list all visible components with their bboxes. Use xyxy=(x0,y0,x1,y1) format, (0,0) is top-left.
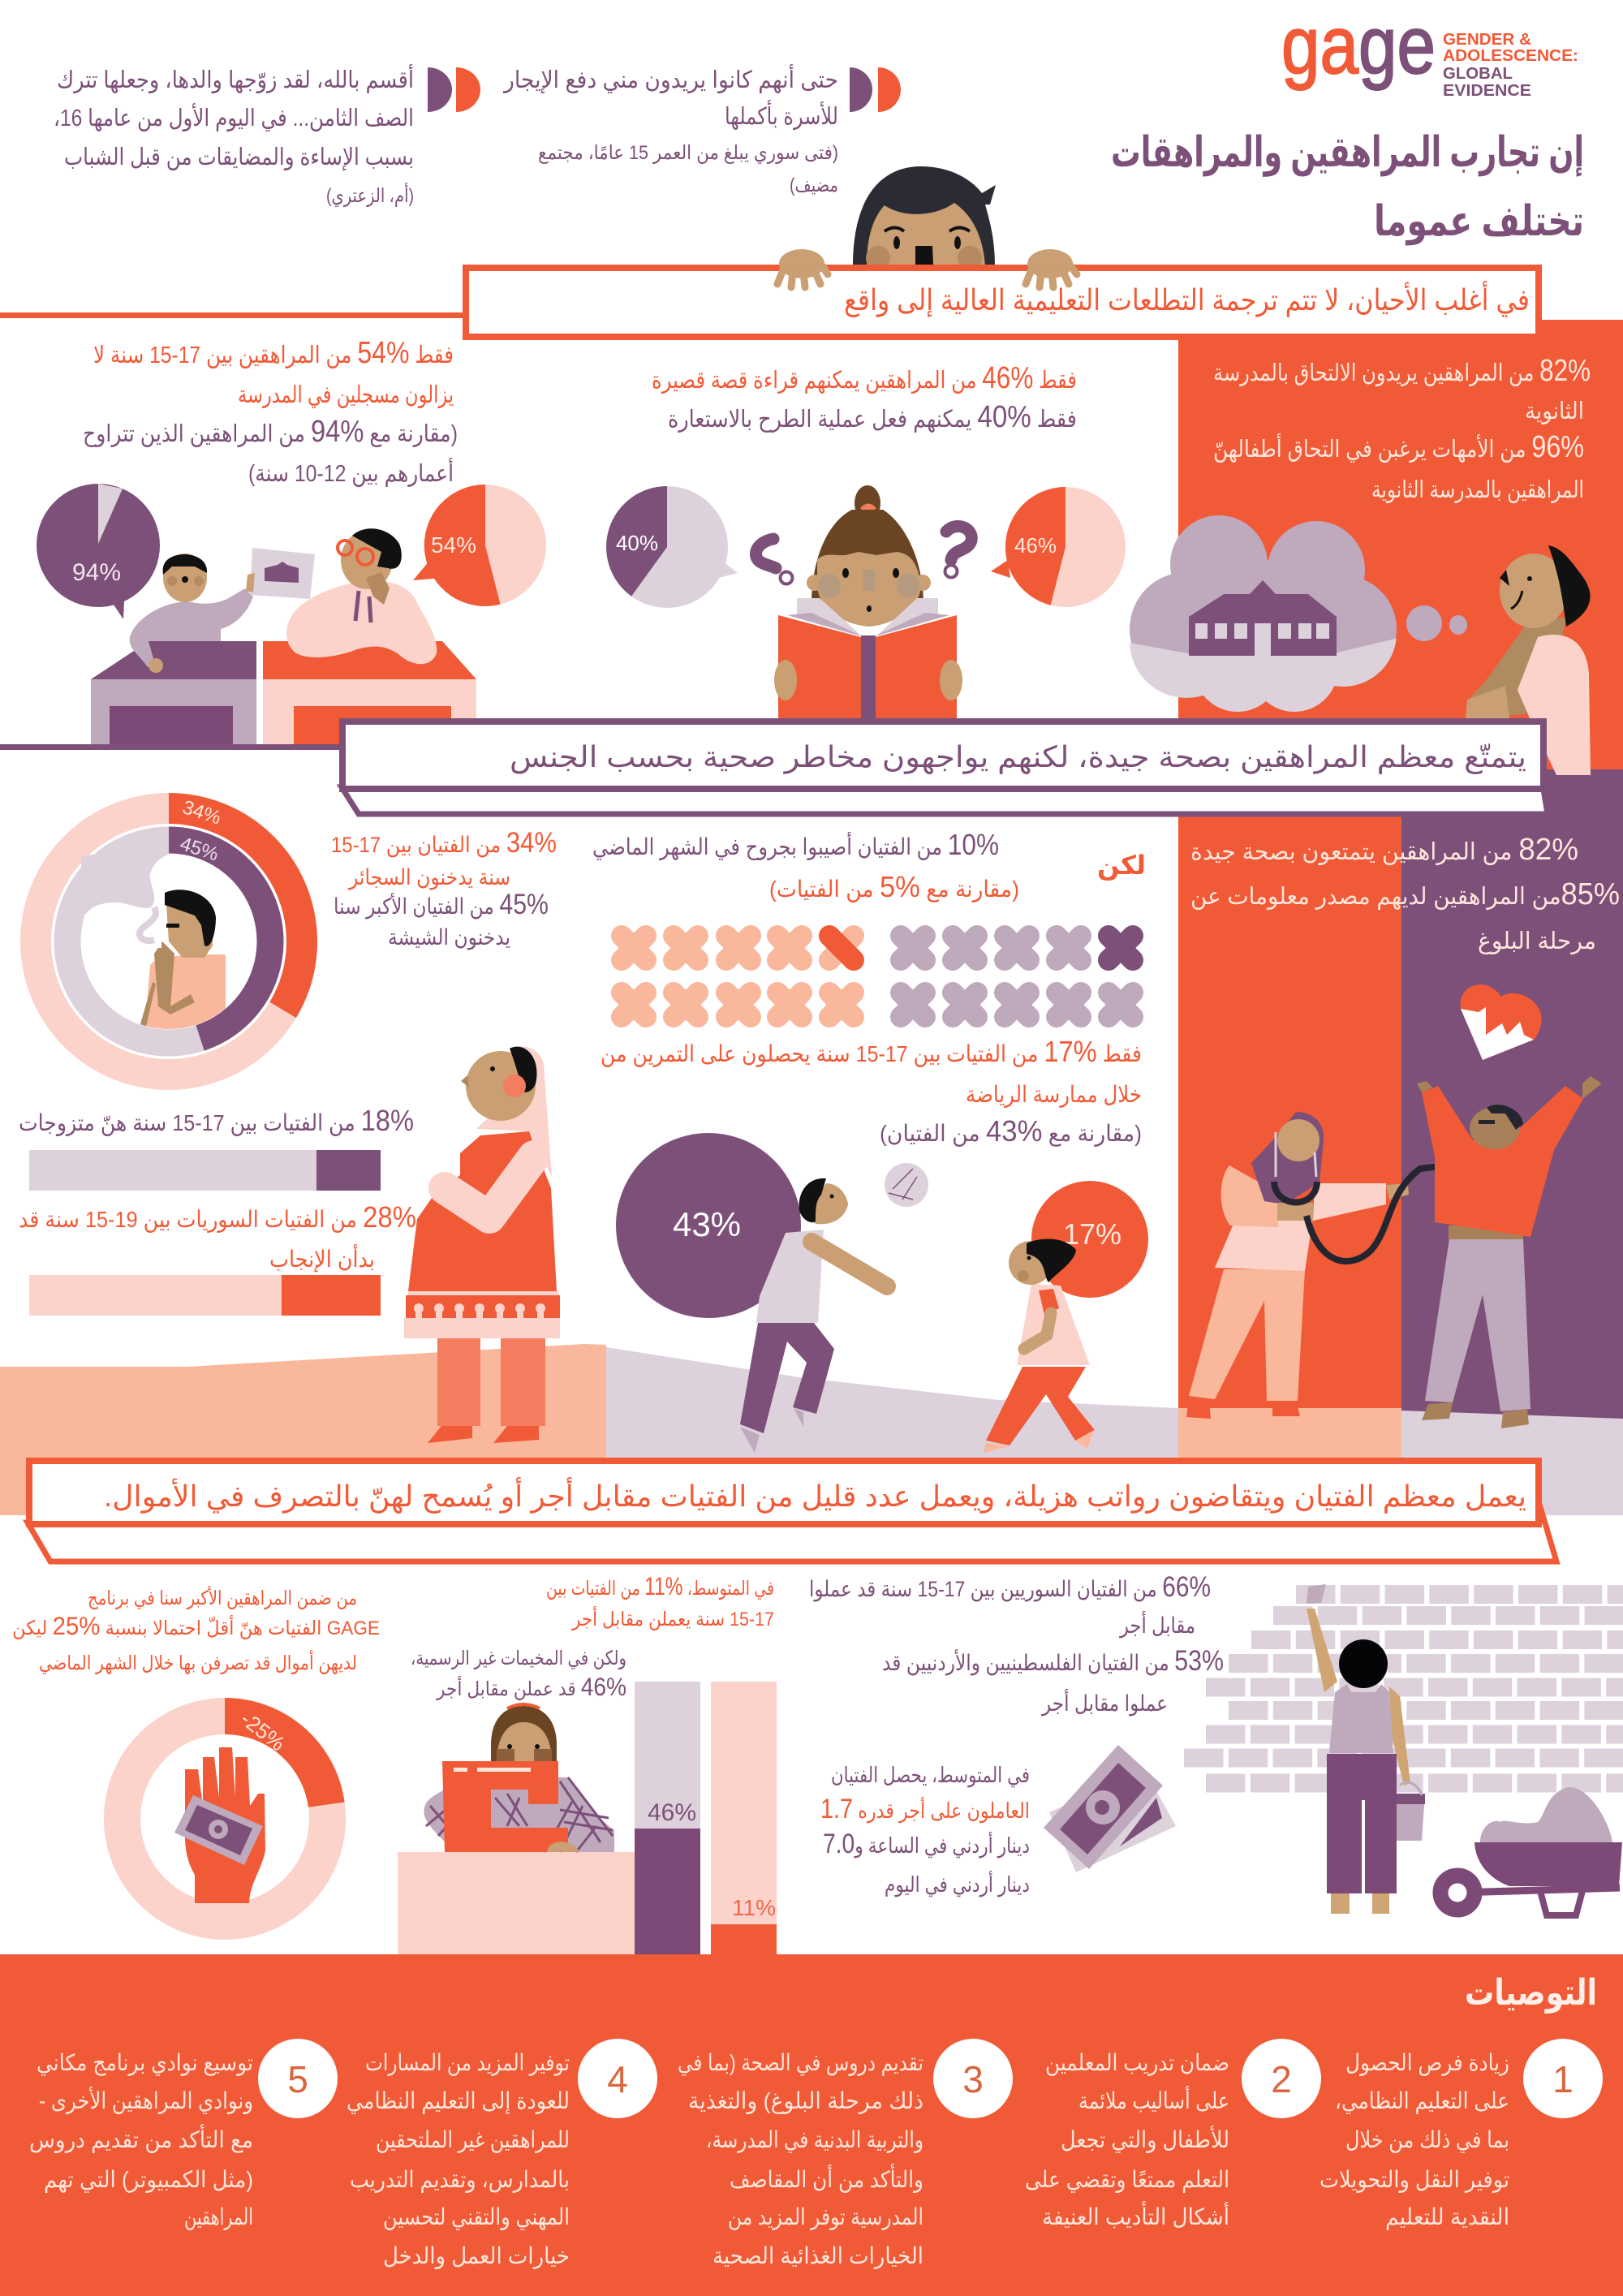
illustration: girl reading xyxy=(774,485,962,721)
pie chart 94% xyxy=(37,484,160,619)
text: married: ⁦18%⁩ من الفتيات بين ⁦15-17⁩ سنة هنّ متزوجات xyxy=(19,1104,414,1137)
text: exercise: خلال ممارسة الرياضة xyxy=(966,1082,1142,1108)
recommendation 1 xyxy=(1319,2039,1603,2230)
text: wages: دينار أردني في الساعة و⁦7.0⁩ xyxy=(823,1829,1030,1859)
donut chart: -25%: -25% xyxy=(236,1706,290,1756)
recommendation 4: خيارات العمل والدخل xyxy=(383,2243,570,2269)
text: enrolment: فقط ⁦54%⁩ من المراهقين بين ⁦15-17⁩ سنة لا xyxy=(93,335,454,369)
recommendation 2: على أساليب ملائمة xyxy=(1078,2085,1229,2113)
illustration: brick wall xyxy=(1184,1594,1623,1783)
recommendation 5: (مثل الكمبيوتر) التي تهم xyxy=(44,2167,253,2193)
pie chart 46%: 46% xyxy=(1014,533,1057,558)
icon: hand holding banknote xyxy=(174,1747,265,1903)
icon: quote marks left xyxy=(428,67,480,112)
recommendation 2: 2 xyxy=(1271,2058,1292,2100)
recommendation 3: تقديم دروس في الصحة (بما في xyxy=(678,2050,923,2076)
logo: GLOBAL xyxy=(1443,65,1513,83)
text: smoking xyxy=(331,827,557,950)
text: aspirations xyxy=(1213,353,1591,503)
illustration: man smoking xyxy=(140,890,226,1031)
illustration: girl at sewing machine xyxy=(398,1704,635,1955)
recommendation 1: على التعليم النظامي، xyxy=(1335,2088,1509,2114)
text: exercise: (مقارنة مع ⁦43%⁩ من الفتيان) xyxy=(880,1114,1142,1148)
recommendation 1: 1 xyxy=(1552,2058,1573,2100)
pie chart 94%: 94% xyxy=(72,559,121,586)
banner: education: في أغلب الأحيان، لا تتم ترجمة التطلعات التعليمية العالية إلى واقع xyxy=(844,281,1530,317)
chart: circle 43% xyxy=(616,1133,801,1318)
donut chart: smoking xyxy=(36,796,302,1075)
recommendation 3: الخيارات الغذائية الصحية xyxy=(712,2243,923,2269)
logo: gage xyxy=(1281,0,1436,91)
recommendation 2: ضمان تدريب المعلمين xyxy=(1045,2050,1229,2076)
illustration: wheelbarrow xyxy=(1440,1787,1622,1915)
text: childbearing: ⁦28%⁩ من الفتيات السوريات بين ⁦15-19⁩ سنة قد xyxy=(19,1200,416,1234)
icon: banknotes xyxy=(1044,1745,1176,1872)
chart: injury plasters boys xyxy=(901,936,1133,1017)
recommendation 5: المراهقين xyxy=(184,2204,253,2230)
text: aspirations: ⁦82%⁩ من المراهقين يريدون الالتحاق بالمدرسة xyxy=(1213,353,1591,387)
text: enrolment xyxy=(83,335,458,488)
text: girls paid work: ولكن في المخيمات غير الرسمية، xyxy=(411,1648,626,1669)
recommendation 5 xyxy=(29,2039,338,2230)
icon: quote marks right xyxy=(850,67,901,112)
recommendation 2: للأطفال والتي تجعل xyxy=(1061,2125,1229,2153)
text: good health xyxy=(1190,832,1620,954)
quote: mother: أقسم بالله، لقد زوّجها والدها، وجعلها تترك xyxy=(57,63,414,94)
recommendation 1: توفير النقل والتحويلات xyxy=(1319,2167,1509,2193)
pie chart 40% xyxy=(606,486,738,608)
text: girls paid work: ⁦46%⁩ قد عملن مقابل أجر xyxy=(436,1673,626,1701)
text: smoking: يدخنون الشيشة xyxy=(388,925,510,950)
illustration: girl playing xyxy=(984,1239,1095,1453)
quote: boy: (فتى سوري يبلغ من العمر 15 عامًا، مجتمع xyxy=(538,142,838,164)
text: wages: في المتوسط، يحصل الفتيان xyxy=(831,1763,1030,1788)
recommendation 3: والتربية البدنية في المدرسة، xyxy=(706,2127,923,2153)
bar chart: childbearing 28% xyxy=(29,1275,381,1316)
logo xyxy=(1281,0,1578,100)
recommendation 4: 4 xyxy=(607,2058,628,2100)
text: smoking: ⁦34%⁩ من الفتيان بين ⁦15-17⁩ xyxy=(331,827,557,859)
banner: work xyxy=(28,1461,1556,1562)
illustration: boy peeking head xyxy=(853,166,996,270)
text: aspirations: الثانوية xyxy=(1525,398,1584,424)
text: money control: من ضمن المراهقين الأكبر سنا في برنامج xyxy=(88,1586,357,1609)
quote: mother: (أم، الزعتري) xyxy=(326,183,414,207)
text: money control xyxy=(12,1586,380,1674)
quote: boy: مضيف) xyxy=(790,174,838,196)
recommendation 1: النقدية للتعليم xyxy=(1385,2204,1509,2230)
text: enrolment: (مقارنة مع ⁦94%⁩ من المراهقين الذين تتراوح xyxy=(83,414,458,448)
recommendation 4: للمراهقين غير الملتحقين xyxy=(376,2127,570,2153)
donut chart: -25% xyxy=(122,1706,328,1922)
title xyxy=(1111,129,1584,246)
illustration: pregnant woman xyxy=(404,1046,560,1443)
chart: circle 17%: 17% xyxy=(1063,1217,1121,1251)
text: wages: العاملون على أجر قدره ⁦1.7⁩ xyxy=(820,1794,1030,1824)
chart: circle 17% xyxy=(1031,1181,1148,1298)
recommendation 4: بالمدارس، وتقديم التدريب xyxy=(350,2167,570,2193)
recommendation 4: للعودة إلى التعليم النظامي xyxy=(347,2088,570,2114)
text: enrolment: أعمارهم بين ⁦10-12⁩ سنة) xyxy=(248,457,454,488)
chart: injury plasters girls xyxy=(622,936,854,1017)
text: girls paid work xyxy=(411,1572,774,1701)
banner: health: يتمتّع معظم المراهقين بصحة جيدة، لكنهم يواجهون مخاطر صحية بحسب الجنس xyxy=(510,740,1526,774)
text: smoking: سنة يدخنون السجائر xyxy=(347,865,510,890)
illustration: thought cloud with school xyxy=(1130,515,1467,712)
illustration: doctor xyxy=(1186,1112,1453,1419)
recommendation 1: زيادة فرص الحصول xyxy=(1345,2050,1509,2076)
icon: heart with pulse xyxy=(1461,984,1542,1060)
text: boys paid work: عملوا مقابل أجر xyxy=(1040,1688,1168,1717)
recommendation 3: 3 xyxy=(962,2058,984,2100)
icon: question marks xyxy=(756,527,971,579)
text: girls paid work: في المتوسط، ⁦11%⁩ من الفتيات بين xyxy=(546,1572,774,1600)
pie chart 54%: 54% xyxy=(431,532,476,558)
heading: recommendations: التوصيات xyxy=(1465,1973,1597,2014)
donut chart: smoking: 45% xyxy=(178,833,222,866)
recommendation 3 xyxy=(678,2039,1013,2269)
banner: education xyxy=(466,268,1539,337)
illustration: painter xyxy=(1307,1584,1425,1914)
text: aspirations: ⁦96%⁩ من الأمهات يرغبن في التحاق أطفالهنّ xyxy=(1213,429,1584,463)
recommendation 2: أشكال التأديب العنيفة xyxy=(1042,2200,1229,2229)
illustration: desks xyxy=(91,641,476,744)
recommendation 4 xyxy=(347,2039,657,2269)
quote: mother xyxy=(54,63,414,207)
text: boys paid work: مقابل أجر xyxy=(1118,1610,1195,1639)
recommendation 3: ذلك مرحلة البلوغ) والتغذية xyxy=(688,2088,923,2114)
illustration: boy with school picture xyxy=(130,548,315,673)
recommendation 2: التعلم ممتعًا وتقضي على xyxy=(1025,2167,1229,2193)
text: enrolment: يزالون مسجلين في المدرسة xyxy=(238,382,454,409)
text: literacy numeracy: فقط ⁦40%⁩ يمكنهم فعل عملية الطرح بالاستعارة xyxy=(668,399,1077,433)
recommendation 5: مع التأكد من تقديم دروس xyxy=(29,2123,253,2153)
logo: ADOLESCENCE: xyxy=(1443,47,1578,65)
text: injuries: (مقارنة مع ⁦5%⁩ من الفتيات) xyxy=(769,870,1019,903)
text: money control: لديهن أموال قد تصرفن بها خلال الشهر الماضي xyxy=(39,1650,357,1674)
bar chart: 46% paid work: 46% xyxy=(648,1799,696,1826)
banner: work: يعمل معظم الفتيان ويتقاضون رواتب هزيلة، ويعمل عدد قليل من الفتيات مقابل أجر أو يُسمح لهنّ بالتصرف في الأموال. xyxy=(104,1477,1526,1514)
illustration: dreaming man xyxy=(1466,545,1591,775)
text: but: لكن xyxy=(1097,851,1146,881)
text: literacy numeracy xyxy=(652,360,1077,433)
recommendation 3: المدرسية توفر المزيد من xyxy=(728,2204,923,2230)
text: exercise: فقط ⁦17%⁩ من الفتيات بين ⁦15-17⁩ سنة يحصلون على التمرين من xyxy=(601,1035,1142,1068)
recommendation 5: ونوادي المراهقين الأخرى - xyxy=(39,2086,253,2114)
text: smoking: ⁦45%⁩ من الفتيان الأكبر سنا xyxy=(334,889,549,920)
text: wages xyxy=(820,1763,1030,1898)
text: childbearing: بدأن الإنجاب xyxy=(269,1243,375,1273)
banner: health xyxy=(342,722,1548,814)
text: injuries: ⁦10%⁩ من الفتيان أصيبوا بجروح في الشهر الماضي xyxy=(592,828,999,861)
illustration: girl with glasses xyxy=(286,528,437,664)
panel: recommendations xyxy=(0,1954,1623,2296)
logo: GENDER & xyxy=(1443,31,1531,49)
recommendation 2 xyxy=(1025,2039,1321,2229)
text: good health: ⁦85%⁩من المراهقين لديهم مصدر معلومات عن xyxy=(1190,877,1620,911)
text: literacy numeracy: فقط ⁦46%⁩ من المراهقين يمكنهم قراءة قصة قصيرة xyxy=(652,360,1077,394)
pie chart 40%: 40% xyxy=(616,531,658,555)
chart: circle 43%: 43% xyxy=(673,1205,741,1243)
icon: boy hands on banner xyxy=(777,249,1077,287)
background panels xyxy=(0,312,1623,1515)
bar chart: 11% paid work xyxy=(711,1682,777,1955)
recommendation 4: المهني والتقني لتحسين xyxy=(383,2204,570,2230)
illustration: boy with raised arms xyxy=(1417,1076,1602,1428)
logo: EVIDENCE xyxy=(1443,82,1531,100)
text: good health: مرحلة البلوغ xyxy=(1478,928,1596,954)
recommendation 4: توفير المزيد من المسارات xyxy=(365,2050,570,2076)
text: injuries xyxy=(592,828,1019,903)
quote: mother: بسبب الإساءة والمضايقات من قبل الشباب xyxy=(64,144,414,171)
donut chart: smoking: 34% xyxy=(180,796,224,829)
text: boys paid work: ⁦53%⁩ من الفتيان الفلسطينيين والأردنيين قد xyxy=(882,1645,1224,1677)
text: boys paid work xyxy=(809,1571,1224,1717)
text: good health: ⁦82%⁩ من المراهقين يتمتعون بصحة جيدة xyxy=(1190,832,1578,866)
text: exercise xyxy=(601,1035,1142,1148)
recommendation 3: والتأكد من أن المقاصف xyxy=(730,2163,923,2193)
pie chart 54% xyxy=(413,485,546,606)
quote: boy: للأسرة بأكملها xyxy=(725,99,838,130)
recommendation 5: 5 xyxy=(287,2058,308,2100)
text: money control: GAGE الفتيات هنّ أقلّ احتمالا بنسبة ⁦25%⁩ ليكن xyxy=(12,1612,380,1640)
illustration: boy playing xyxy=(740,1178,887,1453)
bar chart: 11% paid work: 11% xyxy=(732,1895,776,1920)
recommendation 5: توسيع نوادي برنامج مكاني xyxy=(37,2050,253,2076)
text: girls paid work: ⁦15-17⁩ سنة يعملن مقابل أجر xyxy=(571,1606,774,1630)
text: boys paid work: ⁦66%⁩ من الفتيان السوريين بين ⁦15-17⁩ سنة قد عملوا xyxy=(809,1571,1211,1603)
recommendation 1: بما في ذلك من خلال xyxy=(1345,2127,1509,2153)
bar chart: 46% paid work xyxy=(635,1682,700,1955)
text: wages: دينار أردني في اليوم xyxy=(885,1870,1030,1898)
bar chart: married 18% xyxy=(29,1150,381,1191)
quote: mother: الصف الثامن... في اليوم الأول من عامها 16، xyxy=(54,102,414,132)
quote: boy: حتى أنهم كانوا يريدون مني دفع الإيجار xyxy=(502,63,838,94)
icon: volleyball xyxy=(885,1163,928,1207)
pie chart 46% xyxy=(991,487,1126,607)
quote: boy xyxy=(502,63,838,196)
text: childbearing xyxy=(19,1200,416,1273)
